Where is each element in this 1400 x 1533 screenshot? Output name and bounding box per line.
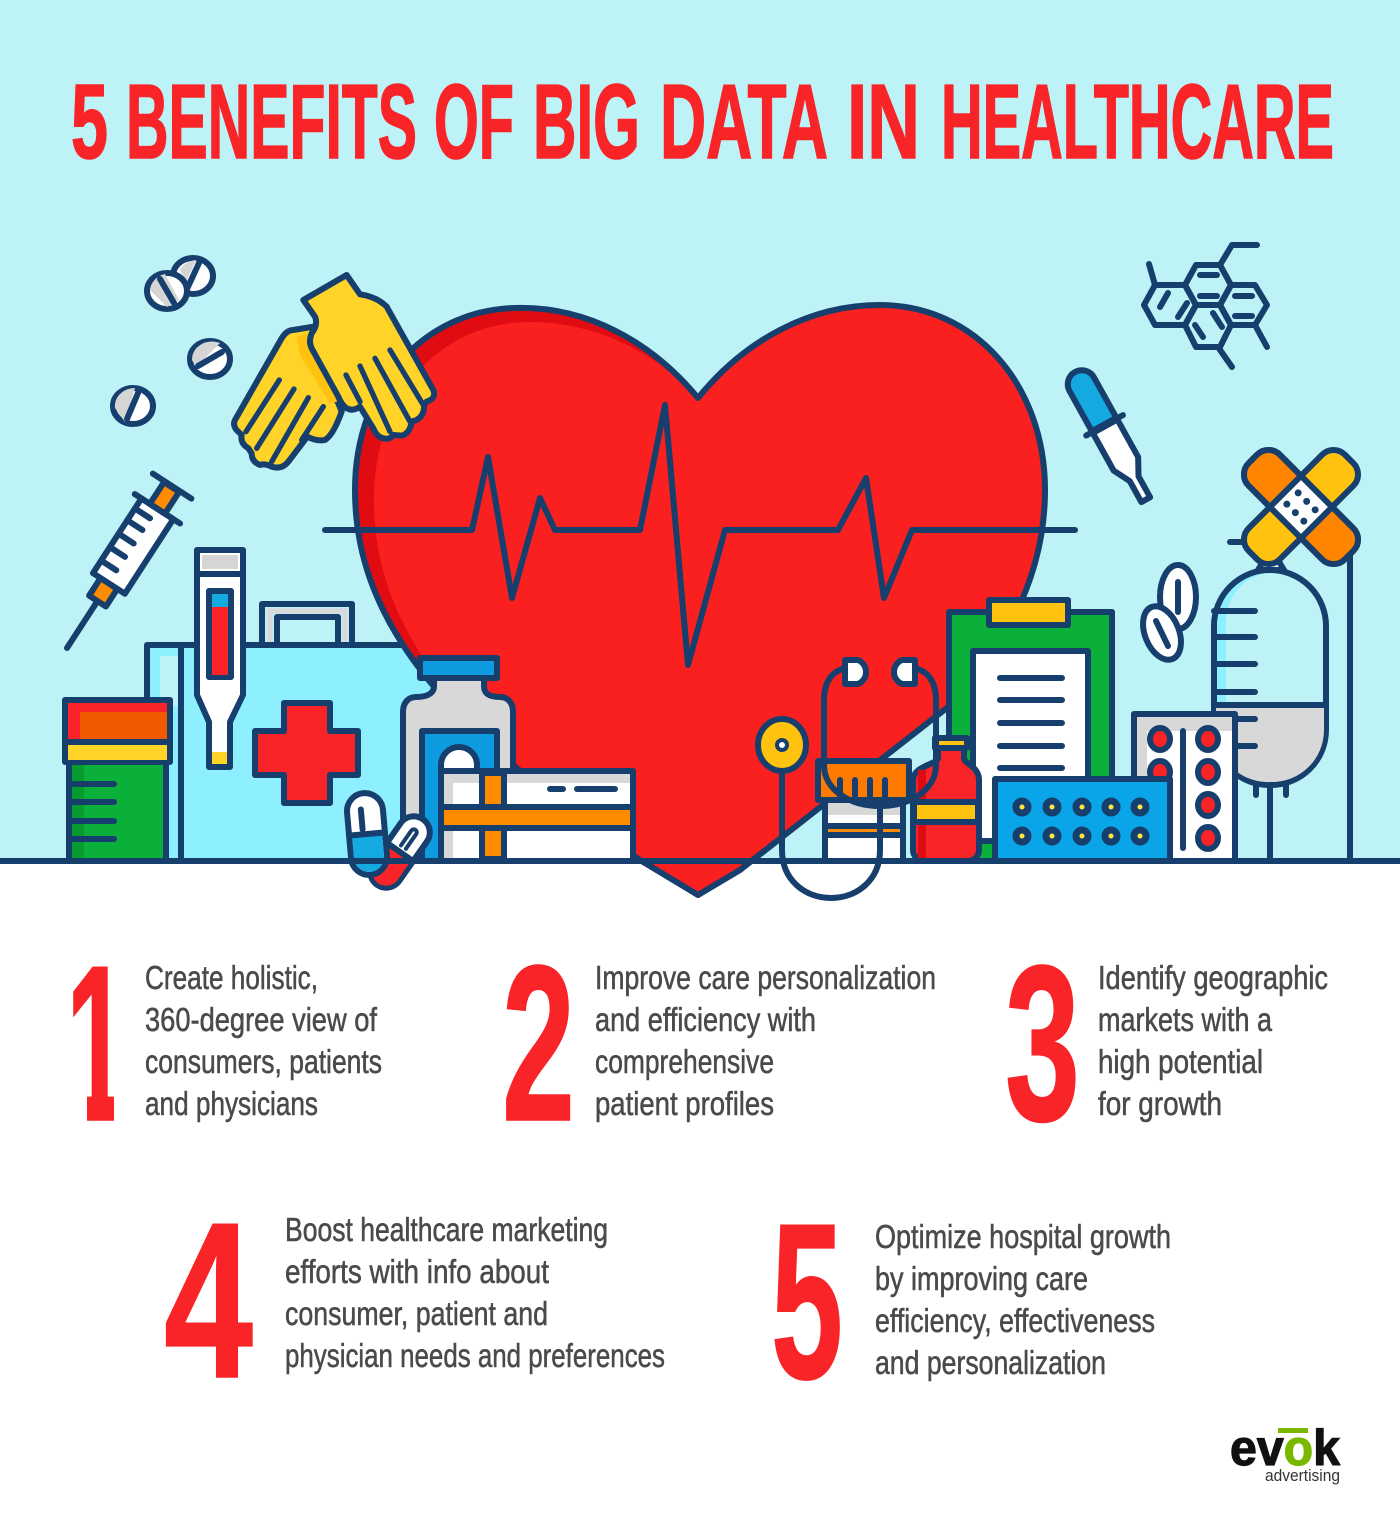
text: benefit 5 (875, 1218, 1171, 1381)
title: OF (434, 63, 514, 181)
number 4: 4 (164, 1177, 253, 1425)
icon: bandage (1237, 443, 1365, 571)
icon: heart with ECG line (325, 305, 1075, 895)
icon: small jar (818, 761, 909, 861)
number 3: 3 (1005, 920, 1080, 1168)
text: benefit 4: consumer, patient and (285, 1295, 548, 1332)
icon: IV pole (1230, 542, 1350, 861)
text: benefit 4 (285, 1211, 665, 1374)
text: benefit 4: Boost healthcare marketing (285, 1211, 608, 1248)
icon: red bottle (913, 738, 979, 861)
number 5: 5 (771, 1178, 843, 1426)
title: BENEFITS (126, 63, 417, 181)
text: benefit 3: markets with a (1098, 1001, 1273, 1038)
icon: molecule (1144, 245, 1267, 367)
icon: thermometer (197, 550, 243, 767)
icon: yellow gloves (234, 275, 434, 468)
text: benefit 5: by improving care (875, 1260, 1088, 1297)
benefit 1 (73, 964, 382, 1122)
icon: IV bag (1214, 560, 1326, 861)
text: benefit 4: efforts with info about (285, 1253, 549, 1290)
number 1: 1 (66, 920, 128, 1168)
ground line (0, 858, 1400, 864)
illustration: healthcare scene (0, 245, 1400, 898)
number 2: 2 (502, 920, 575, 1168)
text: benefit 3: for growth (1098, 1085, 1222, 1122)
text: benefit 2: Improve care personalization (595, 959, 936, 996)
icon: syringe (44, 471, 195, 663)
icon: blister pack (1134, 714, 1235, 861)
icon: clipboard (949, 600, 1112, 861)
text: benefit 5: efficiency, effectiveness (875, 1302, 1155, 1339)
text: benefit 3 (1098, 959, 1328, 1122)
title: 5 (71, 63, 108, 181)
text: benefit 3: Identify geographic (1098, 959, 1328, 996)
icon: green jar (65, 700, 170, 861)
text: benefit 5: and personalization (875, 1344, 1106, 1381)
icon: white box (441, 771, 633, 861)
text: benefit 3: high potential (1098, 1043, 1263, 1080)
benefit 2 (502, 920, 936, 1168)
icon: oval pills (1136, 565, 1196, 665)
title (71, 63, 1334, 181)
benefit 5 (771, 1178, 1171, 1426)
icon: blue pill box (995, 779, 1170, 861)
text: benefit 2: and efficiency with (595, 1001, 816, 1038)
text: benefit 1 (145, 959, 382, 1122)
text: benefit 1: 360-degree view of (145, 1001, 378, 1038)
text: benefit 2: patient profiles (595, 1085, 774, 1122)
benefit 3 (1005, 920, 1328, 1168)
icon: medicine bottle (403, 658, 513, 861)
text: benefit 1: and physicians (145, 1085, 318, 1122)
text: benefit 5: Optimize hospital growth (875, 1218, 1171, 1255)
text: benefit 2: comprehensive (595, 1043, 774, 1080)
text: benefit 2 (595, 959, 936, 1122)
text: benefit 4: physician needs and preferences (285, 1337, 665, 1374)
benefit 4 (164, 1177, 665, 1425)
icon: first aid case (147, 604, 447, 861)
icon: dropper (1057, 362, 1164, 510)
icon: stethoscope (758, 660, 936, 898)
icon: capsules (345, 792, 436, 894)
logo: evok advertising: evok (1230, 1420, 1340, 1476)
logo: evok advertising: advertising (1265, 1466, 1340, 1485)
title: DATA (660, 63, 828, 181)
title: BIG (533, 63, 640, 181)
icon: round pills (113, 258, 230, 424)
text: benefit 1: Create holistic, (145, 959, 318, 996)
title: IN (847, 63, 920, 181)
text: benefit 1: consumers, patients (145, 1043, 382, 1080)
